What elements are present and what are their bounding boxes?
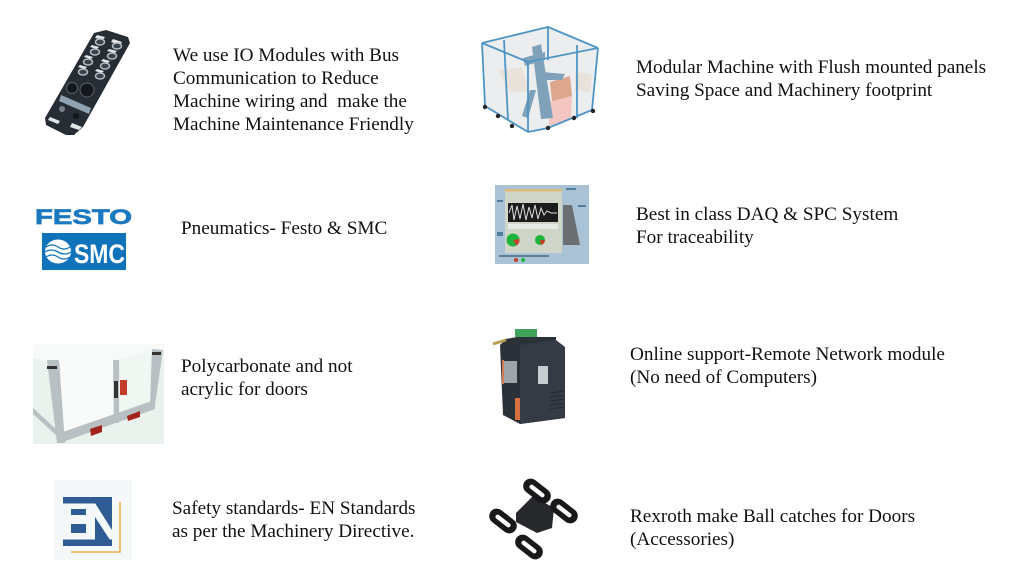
text: online support: Online support-Remote Network module: [630, 344, 945, 365]
text: modular machine: Saving Space and Machinery footprint: [636, 80, 933, 101]
text: safety standards: as per the Machinery Directive.: [172, 521, 414, 542]
text: safety standards: [172, 498, 416, 542]
text: ball catches: (Accessories): [630, 529, 734, 550]
text: modular machine: Modular Machine with Flush mounted panels: [636, 57, 986, 78]
icon: EN standards logo: [54, 480, 132, 560]
text: polycarbonate: Polycarbonate and not: [181, 356, 353, 377]
icon: ball catch: [486, 476, 581, 562]
logo: SMC: SMC: [74, 239, 125, 269]
text: IO modules: Machine wiring and make the: [173, 91, 407, 112]
text: polycarbonate: [181, 356, 353, 400]
text: IO modules: Machine Maintenance Friendly: [173, 114, 414, 135]
icon: modular machine: [482, 27, 598, 132]
text: polycarbonate: acrylic for doors: [181, 379, 308, 400]
text: IO modules: Communication to Reduce: [173, 68, 379, 89]
icon: IO module: [45, 30, 130, 135]
icon: remote network module: [493, 329, 565, 424]
image: polycarbonate door: [33, 344, 164, 444]
text: online support: [630, 344, 945, 388]
text: IO modules: We use IO Modules with Bus: [173, 45, 399, 66]
text: IO modules: [173, 45, 414, 135]
text: ball catches: [630, 506, 915, 550]
text: safety standards: Safety standards- EN Standards: [172, 498, 416, 519]
text: modular machine: [636, 57, 986, 101]
text: DAQ SPC: [636, 204, 898, 248]
text: online support: (No need of Computers): [630, 367, 817, 388]
icon: DAQ SPC screen: [495, 185, 589, 264]
text: ball catches: Rexroth make Ball catches for Doors: [630, 506, 915, 527]
logo: Festo: FESTO: [35, 205, 132, 229]
text: DAQ SPC: For traceability: [636, 227, 754, 248]
text: pneumatics: Pneumatics- Festo & SMC: [181, 218, 387, 239]
text: DAQ SPC: Best in class DAQ & SPC System: [636, 204, 898, 225]
logo: SMC: [42, 233, 126, 270]
